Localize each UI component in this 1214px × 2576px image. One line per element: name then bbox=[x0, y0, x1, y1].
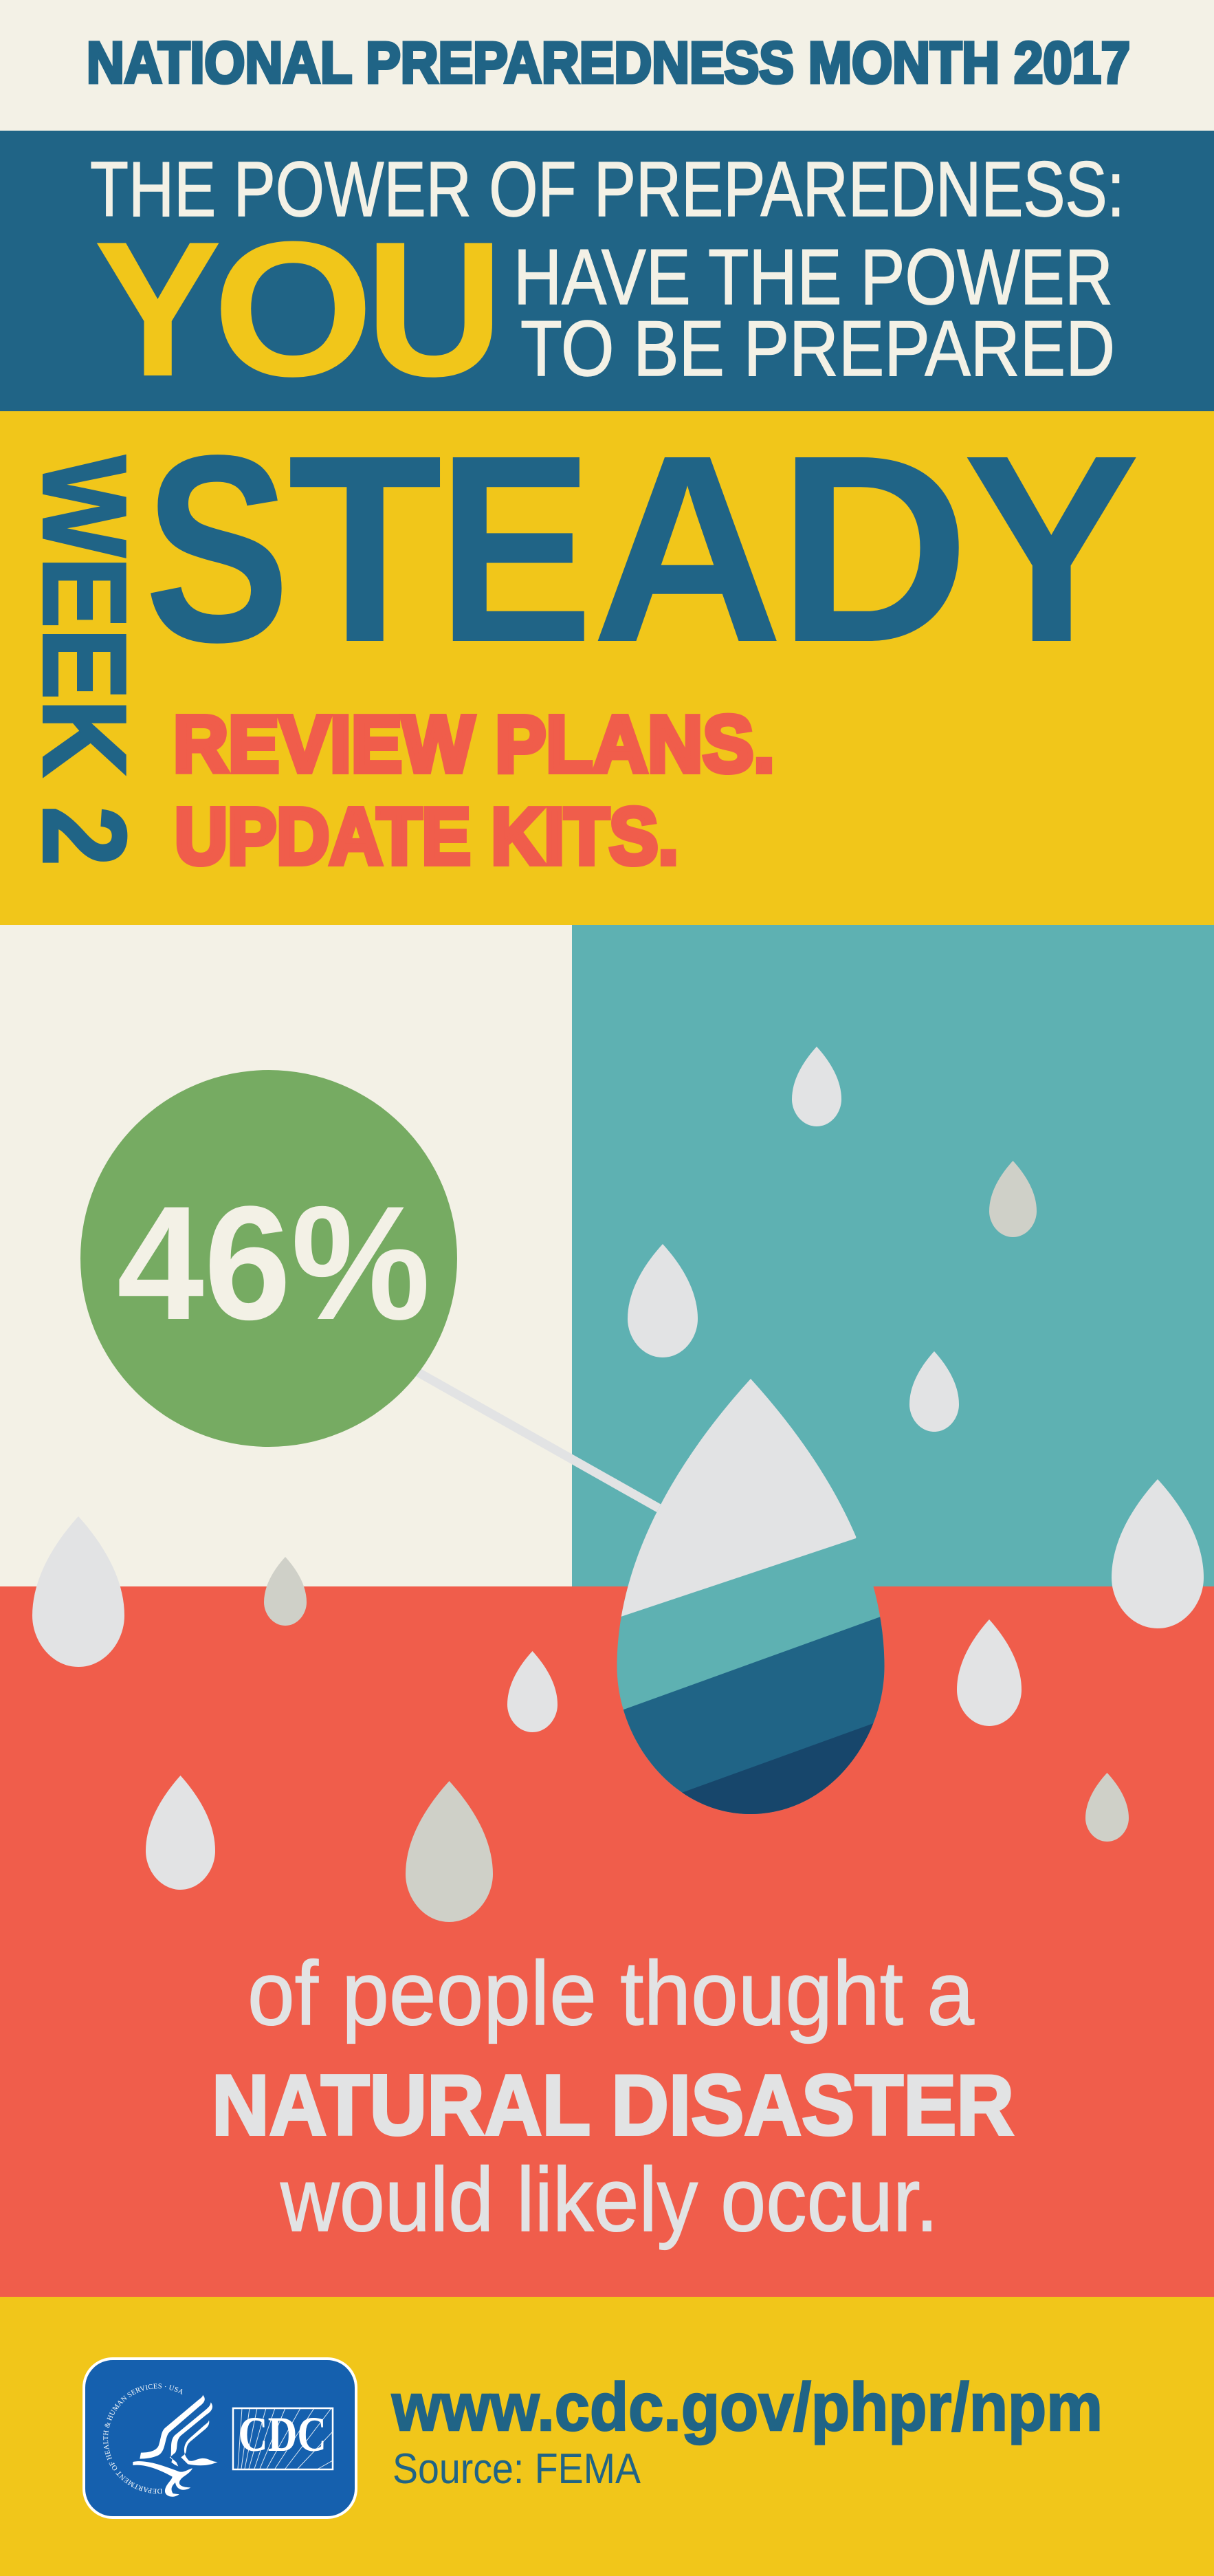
segment: mid blue bbox=[623, 1617, 884, 1814]
icon: drop 1 bbox=[792, 1047, 841, 1126]
label: week 2 vertical: WEEK 2 bbox=[19, 456, 150, 866]
icon: drop 8 bbox=[264, 1557, 307, 1626]
statistic caption bbox=[212, 1943, 1014, 2250]
caption line 2: NATURAL DISASTER bbox=[212, 2058, 1014, 2153]
stat value: 46% bbox=[117, 1172, 430, 1354]
logo: CDC box bbox=[233, 2407, 333, 2469]
panel: yellow steady band bbox=[0, 400, 1214, 925]
panel: footer band bbox=[0, 2297, 1214, 2576]
footer url: www.cdc.gov/phpr/npm bbox=[391, 2369, 1103, 2445]
text: to be prepared: TO BE PREPARED bbox=[520, 305, 1115, 393]
heading: YOU: U bbox=[365, 202, 504, 417]
icon: drop 9 bbox=[507, 1651, 558, 1732]
caption line 1: of people thought a bbox=[247, 1943, 975, 2044]
heading: YOU: Y bbox=[93, 202, 222, 417]
seal text: DEPARTMENT OF HEALTH & HUMAN SERVICES · USA bbox=[103, 2383, 183, 2493]
segment: dark blue bbox=[682, 1723, 873, 1814]
icon: HHS eagle bbox=[133, 2395, 218, 2497]
text: have the power: HAVE THE POWER bbox=[514, 234, 1113, 321]
icon: drop 6 bbox=[957, 1619, 1022, 1726]
heading: YOU: O bbox=[212, 202, 374, 417]
panel: teal background block bbox=[572, 925, 1214, 1586]
panel: beige background block bbox=[0, 925, 572, 1586]
heading: steady: A bbox=[591, 400, 784, 698]
text: review plans: REVIEW PLANS. bbox=[173, 699, 775, 789]
heading: steady: S bbox=[144, 400, 290, 698]
icon: drop 12 bbox=[1085, 1773, 1129, 1842]
caption line 3: would likely occur. bbox=[280, 2149, 938, 2250]
icon: drop 11 bbox=[406, 1781, 493, 1922]
source line: Source: FEMA bbox=[393, 2445, 641, 2493]
rain drops bbox=[32, 1047, 1204, 1922]
title: National Preparedness Month 2017: NATIONAL PREPAREDNESS MONTH 2017 bbox=[87, 30, 1130, 95]
panel: blue theme band bbox=[0, 131, 1214, 417]
heading: steady: T bbox=[287, 400, 443, 698]
connector line from stat circle to drop bbox=[412, 1369, 663, 1511]
segment: 46 percent bbox=[621, 1379, 857, 1617]
logo: HHS and CDC bbox=[82, 2357, 357, 2519]
heading: steady: E bbox=[437, 400, 593, 698]
heading: steady: Y bbox=[962, 400, 1140, 698]
icon: drop 3 bbox=[628, 1244, 698, 1357]
icon: drop 7 bbox=[32, 1516, 124, 1667]
panel: coral statistic block bbox=[0, 1586, 1214, 2297]
text: update kits: UPDATE KITS. bbox=[175, 792, 678, 881]
icon: drop 4 bbox=[909, 1351, 959, 1432]
icon: drop 10 bbox=[146, 1776, 215, 1890]
icon: drop 2 bbox=[989, 1161, 1037, 1237]
heading: steady: D bbox=[777, 400, 970, 698]
panel: top title band bbox=[0, 0, 1214, 131]
stat circle: 46 percent bbox=[80, 1070, 457, 1447]
icon: drop 5 bbox=[1112, 1479, 1204, 1628]
chart: large segmented drop bbox=[617, 1379, 884, 1814]
logo: CDC lettering: CDC bbox=[239, 2407, 327, 2462]
